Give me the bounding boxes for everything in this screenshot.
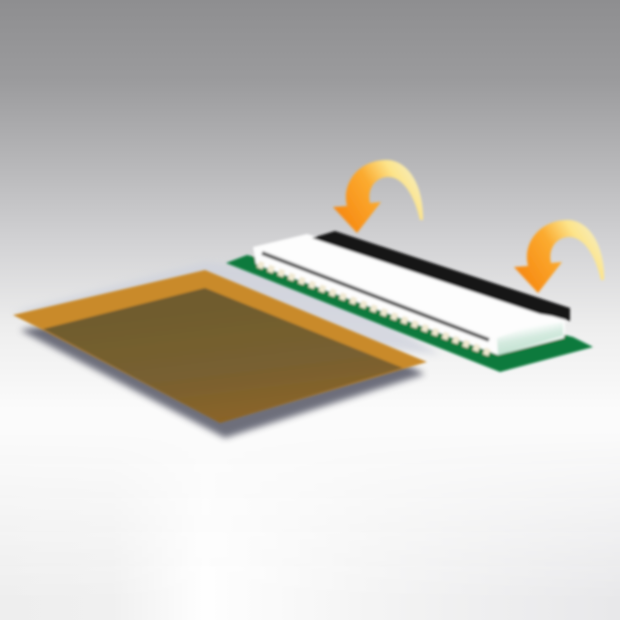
film dark centre	[43, 288, 403, 423]
contact slot	[262, 253, 489, 340]
curved arrow left	[333, 160, 423, 233]
green circuit board	[226, 255, 593, 372]
flexible printed circuit film	[13, 270, 427, 423]
curved arrow right	[514, 220, 604, 293]
black actuator bar	[312, 231, 570, 321]
film shadow	[20, 300, 425, 438]
contact pins row	[258, 264, 490, 353]
connector on circuit board	[226, 231, 593, 372]
pale halo around parts	[13, 262, 440, 355]
green-tinted end cap	[497, 322, 563, 355]
connector white body	[253, 234, 566, 355]
film outer edge	[13, 270, 427, 423]
